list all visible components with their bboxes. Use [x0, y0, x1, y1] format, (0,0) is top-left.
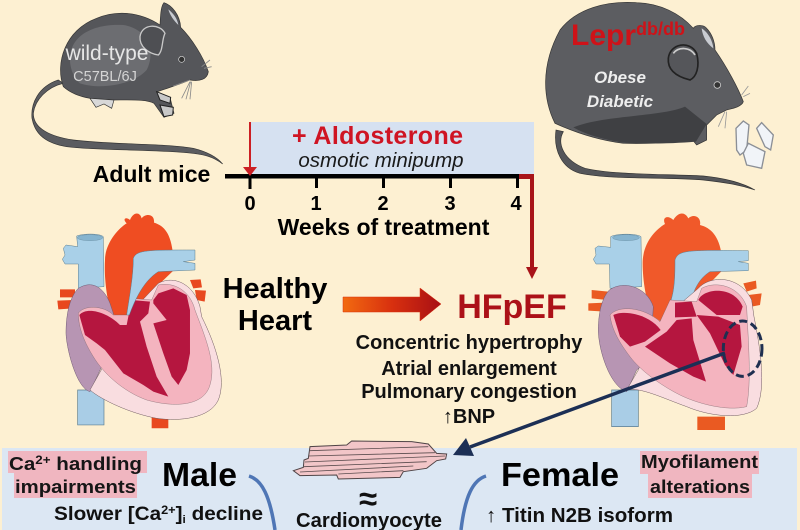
label: diabetic: Diabetic — [587, 92, 654, 111]
mouse: obese diabetic — [546, 2, 773, 190]
icon: cardiomyocyte cell — [293, 441, 447, 479]
label: calcium handling impairments — [8, 451, 147, 498]
text: HFpEF findings: Concentric hypertrophy — [356, 332, 583, 354]
bracket: female curve — [461, 476, 486, 530]
text: titin isoform: ↑ Titin N2B isoform — [486, 505, 673, 527]
heading: Female: Female — [501, 456, 619, 493]
text: HFpEF findings — [356, 332, 583, 428]
text: healthy heart — [223, 273, 327, 337]
text: slower calcium decline: 2+ — [161, 503, 176, 517]
text: slower calcium decline: i — [183, 514, 186, 526]
heart: HFpEF — [588, 214, 762, 430]
label: adult mice: Adult mice — [93, 161, 210, 187]
axis numbers — [244, 193, 522, 215]
text: HFpEF findings: Pulmonary congestion — [361, 381, 577, 403]
label: calcium handling impairments: handling — [51, 453, 142, 474]
label: calcium handling impairments: Ca — [9, 453, 33, 474]
text: HFpEF findings: Atrial enlargement — [381, 358, 557, 380]
axis numbers: 3 — [444, 193, 456, 215]
panel: bottom sex differences — [2, 441, 797, 530]
text: healthy heart: Healthy — [223, 273, 327, 305]
label: myofilament alterations — [640, 451, 759, 498]
label: strain: C57BL/6J — [73, 69, 137, 85]
axis numbers: 0 — [244, 193, 256, 215]
callout: dashed region — [723, 321, 762, 376]
axis numbers: 1 — [310, 193, 322, 215]
arrow: end of treatment to HFpEF — [519, 174, 538, 279]
label: Lepr db/db: Lepr — [571, 19, 636, 52]
axis numbers: 4 — [510, 193, 522, 215]
arrow: heart region to cardiomyocyte — [453, 353, 725, 456]
text: slower calcium decline: Slower [Ca — [54, 503, 155, 525]
heading: Male: Male — [162, 456, 237, 493]
label: myofilament alterations: Myofilament — [641, 451, 758, 472]
symbol: approximately equal: ≈ — [359, 480, 377, 517]
label: myofilament alterations: alterations — [650, 476, 750, 497]
text: osmotic minipump: osmotic minipump — [298, 149, 464, 172]
text: aldosterone: + Aldosterone — [292, 122, 463, 150]
heart: healthy — [57, 214, 221, 428]
text: healthy heart: Heart — [238, 305, 312, 337]
icon: sugar cubes — [736, 121, 773, 168]
timeline — [225, 174, 522, 240]
arrow: start of treatment — [243, 122, 257, 176]
label: wild-type: wild-type — [65, 42, 148, 65]
label: obese: Obese — [594, 68, 646, 87]
text: slower calcium decline: ] — [176, 503, 183, 525]
label: calcium handling impairments: impairments — [15, 476, 136, 497]
bracket: male curve — [249, 476, 275, 530]
text: HFpEF findings: ↑BNP — [443, 406, 495, 428]
text: slower calcium decline: decline — [186, 503, 263, 525]
panel: aldosterone treatment — [250, 122, 534, 175]
mouse: wild-type — [32, 3, 223, 164]
arrow: healthy to HFpEF — [343, 288, 441, 321]
label: Lepr db/db: db/db — [636, 19, 685, 39]
label: calcium handling impairments: 2+ — [35, 453, 51, 467]
axis numbers: 2 — [377, 193, 389, 215]
pulmonary artery — [127, 250, 195, 315]
heading: HFpEF: HFpEF — [457, 288, 567, 326]
axis title: Weeks of treatment — [278, 214, 490, 240]
